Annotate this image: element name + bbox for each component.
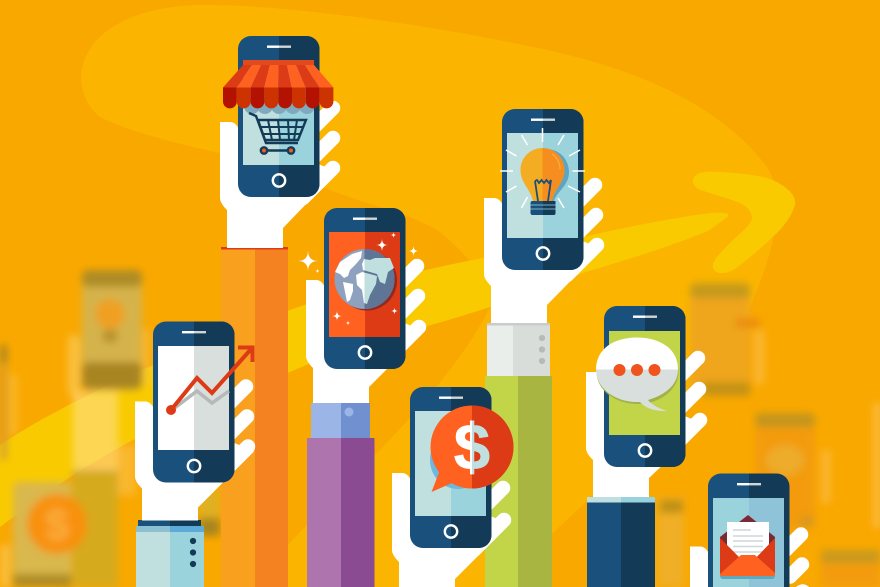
cart and awning shadow <box>244 98 315 154</box>
icon: speech bubble <box>596 338 678 411</box>
icon: dollar speech bubble <box>430 406 514 492</box>
hand <box>135 386 254 520</box>
blurred phone: right upper <box>690 283 764 396</box>
icon: envelope with letter <box>720 515 775 579</box>
icon: shopping cart <box>249 113 306 154</box>
blurred phone: dollar <box>0 445 136 587</box>
blurred phone: dollar: $ <box>45 501 69 550</box>
phone in hand: email <box>690 474 809 587</box>
arm: light blue sleeve <box>136 520 204 587</box>
hand <box>392 458 509 587</box>
arm: orange sleeve <box>221 247 288 587</box>
phone in hand: chat <box>586 306 705 497</box>
hand <box>306 266 424 403</box>
blurred arm: right <box>657 403 880 587</box>
arm: navy sleeve <box>587 497 655 587</box>
icon: shop awning <box>223 60 334 108</box>
phone in hand: lightbulb <box>484 109 601 323</box>
icon: lightbulb <box>500 128 585 215</box>
line chart icon <box>166 348 252 415</box>
hand <box>690 534 809 587</box>
blurred sleeve shadow <box>199 490 220 536</box>
blurred phone: right middle <box>755 413 830 529</box>
hand <box>586 358 705 497</box>
phone body cropped at the frame edge <box>708 474 790 587</box>
hand <box>220 108 336 248</box>
phone in hand: shopping <box>220 36 336 248</box>
icon: globe <box>334 249 397 310</box>
phone in hand: world <box>306 208 424 403</box>
icon: dollar speech bubble: $ <box>454 410 490 483</box>
sparkles <box>298 232 418 326</box>
blurred phone: left edge <box>0 345 17 460</box>
blurred phone: bulb <box>68 270 150 470</box>
phone in hand: dollar <box>392 387 509 587</box>
blurred phone: right lower <box>821 550 880 587</box>
background swoosh: yellow arrow <box>0 172 795 527</box>
blurred background phones <box>0 270 880 587</box>
arm: purple sleeve with blue cuff <box>307 403 374 587</box>
arm: green sleeve with white cuff <box>485 323 552 587</box>
phone in hand: chart <box>135 322 254 520</box>
background swoosh: large light shape <box>81 5 777 587</box>
hand <box>484 185 601 323</box>
